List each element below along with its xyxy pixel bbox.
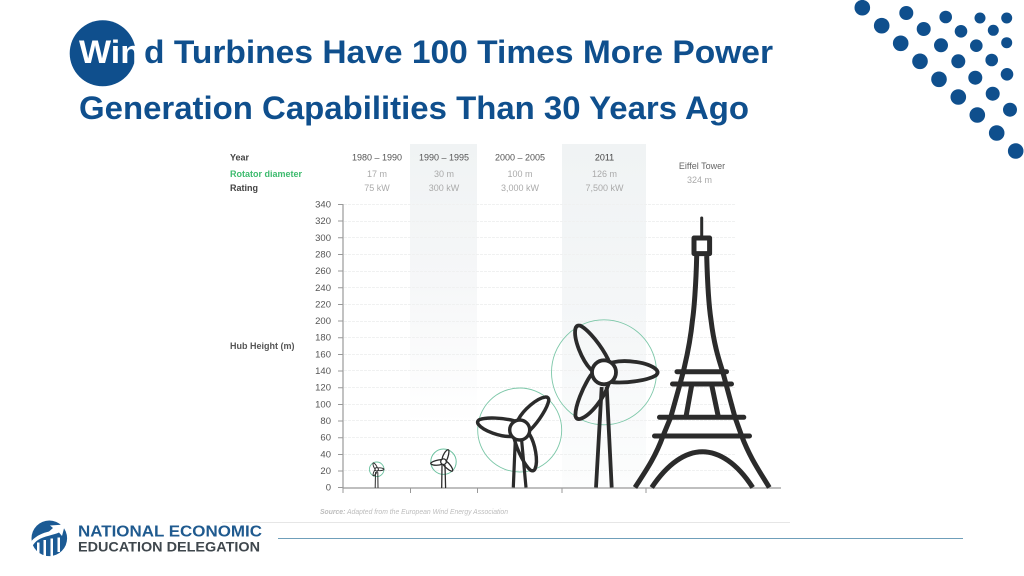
column: 2000-2005 values: 3,000 kW (501, 183, 540, 193)
title: Generation Capabilities Than 30 Years Ago (79, 90, 749, 126)
column: 2011 values: 2011 (595, 152, 614, 162)
turbine: 1990-1995 (430, 449, 456, 488)
column: 2011 values: 126 m (592, 169, 617, 179)
column: 2000-2005 values (495, 152, 545, 193)
y axis labels: 20 (320, 466, 331, 477)
column: 1980-1990 values: 17 m (367, 169, 387, 179)
y axis labels: 80 (320, 416, 331, 427)
shaded column: 2011 (562, 144, 646, 488)
column: 2011 values: 7,500 kW (585, 183, 624, 193)
column: 2000-2005 values: 100 m (507, 169, 533, 179)
column: Eiffel Tower values: Eiffel Tower (679, 161, 725, 171)
y axis labels: 140 (315, 366, 331, 377)
column: 1990-1995 values: 300 kW (429, 183, 460, 193)
column: 2011 values (585, 152, 624, 193)
column: 1990-1995 values (419, 152, 469, 193)
turbine: 2011 (552, 320, 658, 488)
turbine: 1980-1990 (369, 462, 384, 488)
column: 2000-2005 values: 2000 – 2005 (495, 152, 545, 162)
column: Eiffel Tower values: 324 m (687, 175, 712, 185)
column: 1980-1990 values (352, 152, 402, 193)
y axis labels: 240 (315, 283, 331, 294)
y axis labels: 0 (326, 483, 331, 494)
chart axes (338, 204, 781, 493)
y axis labels: 160 (315, 349, 331, 360)
table header labels: Rating (230, 183, 258, 193)
y axis labels: 320 (315, 216, 331, 227)
decorative dot triangle (854, 0, 1024, 159)
y axis labels: 300 (315, 233, 331, 244)
table header labels: Rotator diameter (230, 169, 303, 179)
title (79, 34, 773, 126)
logo icon (32, 520, 67, 556)
table header labels (230, 152, 303, 193)
footer rule (278, 538, 963, 540)
table header labels: Year (230, 152, 250, 162)
shaded column: 1990-1995 (410, 144, 477, 424)
y axis labels: 100 (315, 399, 331, 410)
turbine: 2000-2005 (476, 388, 562, 488)
column: 1990-1995 values: 30 m (434, 169, 454, 179)
y axis title: Hub Height (m) (230, 341, 294, 351)
title: Win (79, 34, 141, 70)
column: 1980-1990 values: 75 kW (364, 183, 390, 193)
y axis labels: 180 (315, 333, 331, 344)
chart grid lines (344, 204, 735, 470)
y axis labels: 200 (315, 316, 331, 327)
y axis labels: 120 (315, 383, 331, 394)
column: 1980-1990 values: 1980 – 1990 (352, 152, 402, 162)
column: Eiffel Tower values (679, 161, 725, 185)
logo text (78, 524, 262, 554)
y axis labels: 280 (315, 250, 331, 260)
y axis labels (315, 200, 331, 494)
source note: Source: Adapted from the European Wind Energy Association (320, 509, 508, 516)
y axis labels: 260 (315, 266, 331, 277)
y axis labels: 40 (320, 449, 331, 460)
icon: Eiffel Tower (635, 218, 769, 488)
title: d Turbines Have 100 Times More Power (144, 34, 773, 70)
y axis labels: 60 (320, 433, 331, 444)
logo text: NATIONAL ECONOMIC (78, 524, 262, 540)
y axis labels: 220 (315, 299, 331, 310)
title badge circle (70, 20, 136, 86)
logo text: EDUCATION DELEGATION (78, 538, 260, 554)
column: 1990-1995 values: 1990 – 1995 (419, 152, 469, 162)
chart bottom rule (222, 522, 790, 524)
y axis labels: 340 (315, 200, 331, 210)
